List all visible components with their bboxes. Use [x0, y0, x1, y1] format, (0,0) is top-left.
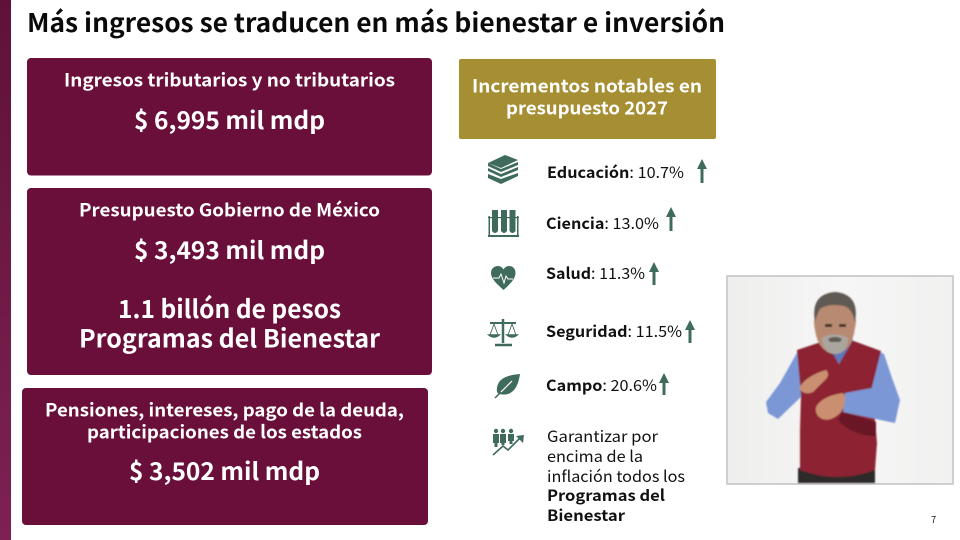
amount: ingresos: $ 6,995 mil mdp	[134, 101, 325, 136]
panel heading: pensiones	[45, 396, 404, 444]
icon: heart	[491, 266, 516, 290]
panel: incrementos heading	[459, 59, 716, 139]
title: Más ingresos se traducen en más bienestar e inversión	[27, 3, 725, 40]
programas del bienestar text: 1.1 billón de pesos	[118, 290, 341, 326]
panel heading: ingresos: Ingresos tributarios y no tributarios	[64, 66, 395, 92]
icon: people and growth	[493, 429, 524, 455]
icon: books	[488, 155, 518, 184]
moustache	[828, 337, 842, 342]
neck and collar	[826, 332, 853, 364]
panel: pensiones	[22, 388, 428, 525]
shirt right forearm	[843, 380, 900, 423]
text: garantizar	[547, 425, 685, 526]
arrow: ciencia	[666, 207, 676, 231]
sidebar stripe	[0, 0, 11, 540]
panel: incrementos heading: Incrementos notables en	[472, 72, 702, 98]
eyes	[825, 324, 832, 327]
arrow: seguridad	[685, 320, 695, 343]
row: seguridad: Seguridad: 11.5%	[546, 320, 682, 342]
shirt left arm	[766, 351, 806, 419]
vest shadow	[838, 412, 876, 436]
text: garantizar: inflación todos los	[547, 465, 685, 487]
page number: 7	[931, 512, 936, 526]
photo: sign language interpreter	[727, 276, 953, 484]
row: campo: Campo: 20.6%	[546, 374, 657, 396]
text: garantizar: Garantizar por	[547, 425, 659, 447]
programas del bienestar text: Programas del Bienestar	[79, 320, 380, 356]
vest	[797, 340, 881, 477]
arrow: salud	[649, 262, 659, 285]
icon: test tubes	[488, 210, 519, 237]
row: educacion: Educación: 10.7%	[547, 161, 684, 183]
arrow: campo	[659, 373, 669, 395]
row: ciencia: Ciencia: 13.0%	[546, 212, 659, 234]
head	[814, 292, 856, 354]
amount: presupuesto: $ 3,493 mil mdp	[134, 231, 325, 266]
programas del bienestar text	[79, 290, 380, 356]
panel heading: pensiones: participaciones de los estados	[87, 418, 362, 444]
beard	[822, 334, 848, 354]
shirt right upper arm	[868, 350, 900, 410]
hands	[799, 370, 828, 393]
text: garantizar: Bienestar	[547, 504, 625, 526]
text: garantizar: Programas del	[547, 484, 665, 506]
row: salud: Salud: 11.3%	[546, 262, 645, 284]
panel heading: pensiones: Pensiones, intereses, pago de la deuda,	[45, 396, 404, 422]
icon: leaf	[495, 374, 520, 398]
panel: ingresos	[27, 58, 432, 176]
text: garantizar: encima de la	[547, 445, 643, 467]
trousers	[798, 468, 875, 483]
panel: incrementos heading: presupuesto 2027	[506, 94, 668, 120]
arrow: educacion	[697, 159, 707, 183]
panel heading: presupuesto: Presupuesto Gobierno de México	[79, 196, 380, 222]
icon: scales	[489, 319, 517, 345]
amount: pensiones: $ 3,502 mil mdp	[129, 452, 320, 487]
hair	[814, 292, 856, 322]
panel: presupuesto	[27, 188, 432, 375]
